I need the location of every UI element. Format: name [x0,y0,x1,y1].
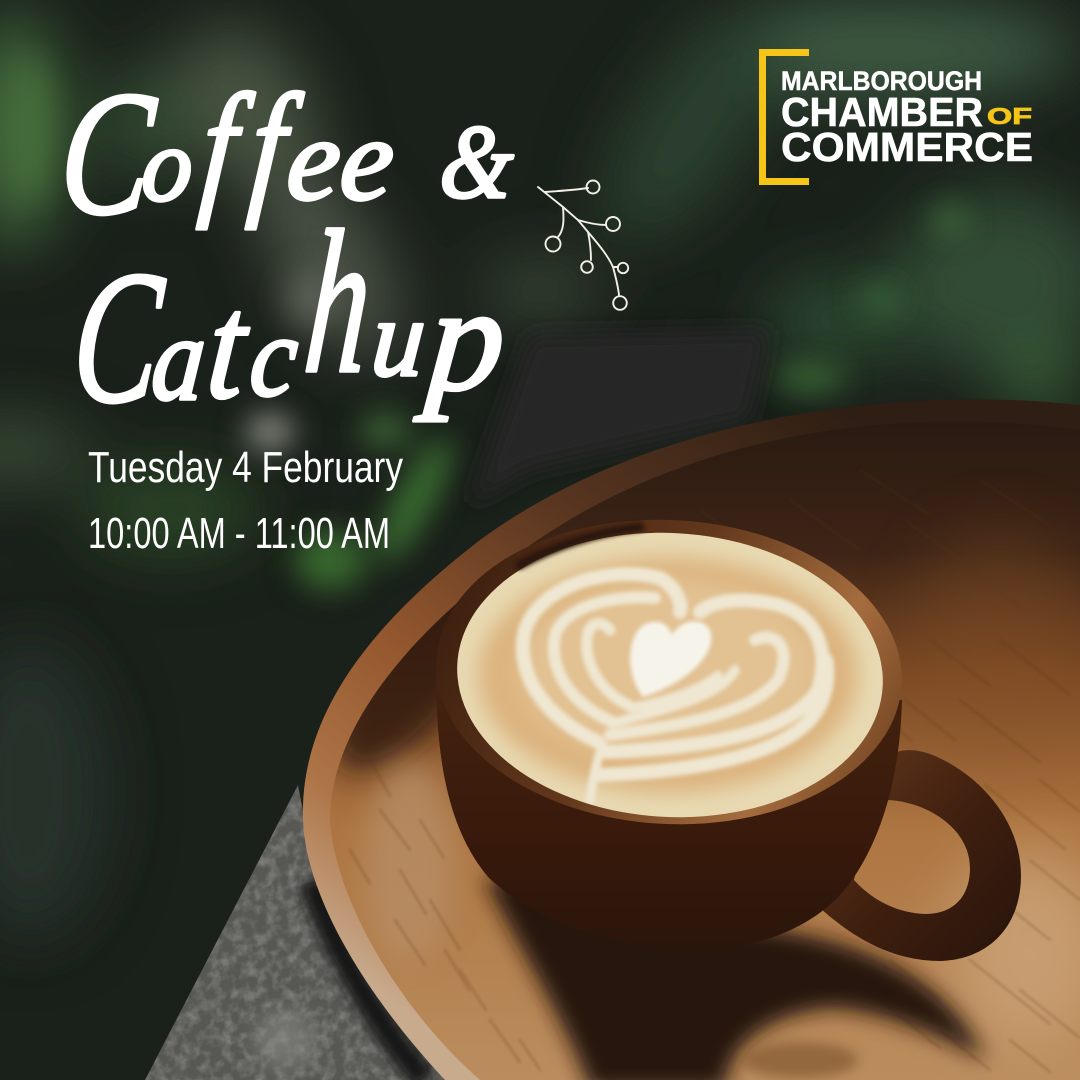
cup handle [820,750,1021,961]
logo: Marlborough Chamber of Commerce [762,52,1033,182]
title line 1: e [283,94,346,225]
title line 1: e [336,94,399,225]
title line 2: p [413,255,512,422]
cup rim [428,508,910,836]
title line 2: h [298,189,380,416]
title line 1: f [195,63,259,230]
stone ledge [145,785,445,1080]
title line 2: u [367,277,430,399]
shadow under plate [312,880,425,1080]
event details [88,443,403,558]
title line 2: C [66,232,170,443]
title line 1: f [244,63,308,230]
title line 1: o [138,106,198,223]
title line 2: c [246,292,303,420]
title line 2: t [202,263,255,430]
lit patch in shadow [742,1042,858,1078]
logo word Marlborough: MARLBOROUGH [781,66,982,96]
title: Coffee & Catchup [53,54,523,443]
rim dark wedge [520,527,640,565]
coffee cup [428,508,1021,961]
latte heart [630,621,711,697]
logo word Chamber: CHAMBER [781,89,983,135]
title line 2: a [147,293,211,426]
cup body [436,670,902,950]
latte art swirls [523,574,827,800]
latte foam [450,525,890,825]
time: 10:00 AM - 11:00 AM [88,509,390,558]
dark post behind plate [470,330,770,505]
plate rim [303,399,1080,1080]
plate surface [330,421,1080,1080]
logo word Commerce: COMMERCE [781,124,1033,170]
icon: botanical branch [538,180,628,310]
plate lighting and shadows [300,470,1080,1080]
date: Tuesday 4 February [88,443,403,492]
cup shadow [485,876,985,1080]
wood grain [349,730,1080,1073]
wooden plate [300,399,1080,1080]
title line 1: C [53,54,162,252]
title line 1: & [436,103,518,220]
logo bracket [762,52,809,182]
logo word of: OF [987,103,1032,129]
